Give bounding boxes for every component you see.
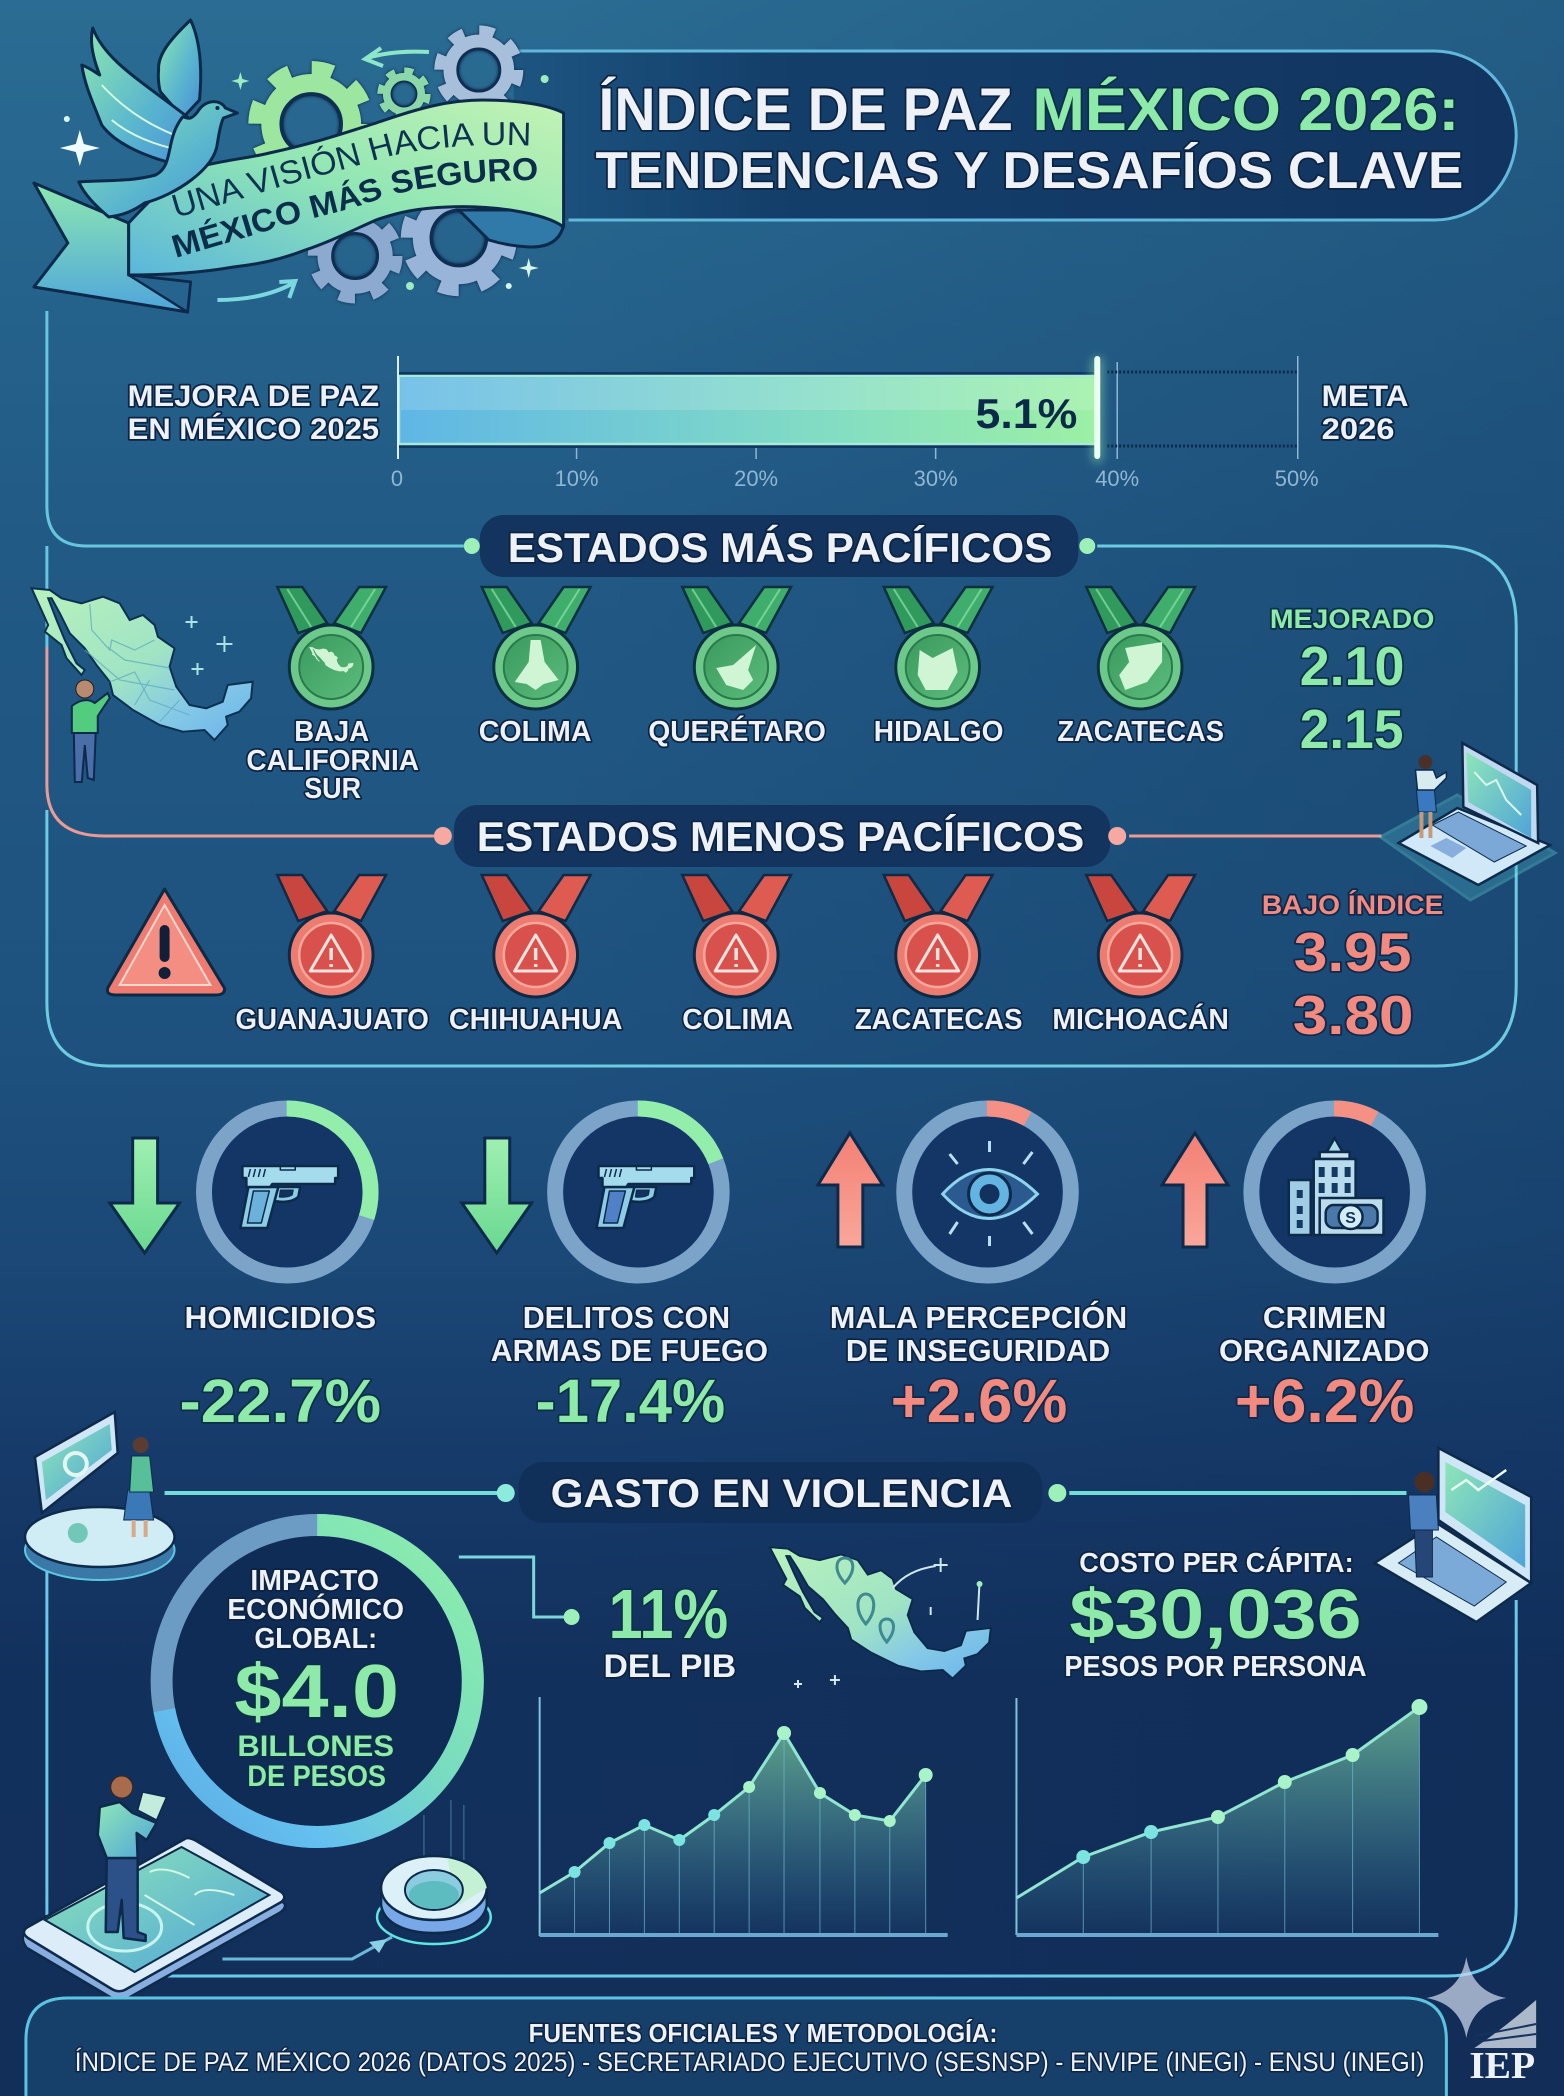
heading: violence spending: [497, 1462, 1066, 1523]
map with person: [32, 588, 253, 782]
icon: building and money: S: [1345, 1210, 1356, 1227]
medal: Querétaro: [648, 587, 826, 748]
bar label: MEJORA DE PAZ: [128, 380, 379, 413]
axis labels: 30%: [914, 466, 958, 491]
medal: Zacatecas: ZACATECAS: [1057, 716, 1224, 748]
low scores: [1262, 889, 1443, 1046]
stats row: [110, 1108, 1429, 1435]
stat: organized crime: +6.2%: [1235, 1367, 1414, 1435]
progress bar: [128, 356, 1408, 491]
heading pill: [464, 515, 1095, 577]
goal label: 2026: [1322, 413, 1395, 446]
medal: Zacatecas: [855, 875, 1022, 1036]
connector to GDP: [459, 1557, 580, 1625]
arrow to donut: [222, 1937, 392, 1959]
per capita cost: PESOS POR PERSONA: [1064, 1651, 1367, 1683]
medal: Guanajuato: [235, 875, 429, 1036]
chart points: [1076, 1699, 1427, 1864]
improved scores: MEJORADO: [1270, 604, 1434, 634]
stat: insecurity perception: MALA PERCEPCIÓN: [830, 1299, 1127, 1335]
stat: insecurity perception: [818, 1108, 1127, 1435]
sparkles and curved arrows: [60, 48, 549, 300]
stat: insecurity perception: DE INSEGURIDAD: [846, 1333, 1110, 1368]
medal: Michoacán: [1052, 875, 1229, 1036]
economic impact ring: [162, 1525, 473, 1837]
zero line: [397, 356, 399, 459]
medal: Colima: [479, 587, 592, 748]
title line 1: MÉXICO 2026:: [1032, 76, 1459, 143]
ring text: [227, 1565, 404, 1793]
per capita cost: $30,036: [1069, 1575, 1362, 1653]
per capita cost: COSTO PER CÁPITA:: [1079, 1547, 1354, 1578]
line chart: GDP: [540, 1697, 948, 1935]
stat: homicides: -22.7%: [180, 1367, 381, 1435]
warning icon: [107, 889, 225, 995]
stat: homicides: [110, 1108, 381, 1435]
medal: Colima: [682, 875, 793, 1036]
medal: Baja California Sur: CALIFORNIA: [246, 745, 419, 777]
medal: Baja California Sur: BAJA: [294, 716, 369, 748]
stat: organized crime: [1162, 1108, 1429, 1435]
medal: Hidalgo: [874, 587, 1003, 748]
improved scores: 2.15: [1300, 698, 1403, 760]
stat: firearms: DELITOS CON: [523, 1300, 730, 1335]
3D donut: [222, 1800, 491, 1959]
low scores: 3.95: [1294, 921, 1411, 983]
line chart: per capita: [1016, 1698, 1438, 1935]
ribbon tail: [34, 183, 191, 312]
medal: Colima: COLIMA: [479, 716, 592, 748]
icon: pistol: [597, 1166, 694, 1228]
medal: Baja California Sur: [246, 587, 419, 805]
section: most peaceful: [32, 515, 1434, 805]
monitor with analyst on disk: [25, 1412, 175, 1580]
ring text: GLOBAL:: [254, 1623, 377, 1655]
dove: [79, 20, 237, 217]
axis labels: [391, 466, 1319, 491]
ring text: IMPACTO: [250, 1565, 379, 1597]
axis labels: 50%: [1275, 466, 1319, 491]
footer heading: FUENTES OFICIALES Y METODOLOGÍA:: [529, 2018, 998, 2048]
ribbon fold: [459, 210, 564, 247]
medal: Hidalgo: HIDALGO: [874, 716, 1003, 748]
frame lines: [47, 311, 1516, 1976]
medal: Baja California Sur: SUR: [304, 773, 361, 805]
laptop with analyst: [1375, 1448, 1531, 1622]
banner illustration: [32, 18, 566, 314]
IEP logo: IEP: [1469, 2045, 1535, 2087]
medal: Zacatecas: ZACATECAS: [855, 1004, 1022, 1036]
medal: Guanajuato: GUANAJUATO: [235, 1004, 429, 1036]
icon: pistol: [240, 1166, 338, 1228]
title line 2: TENDENCIAS Y DESAFÍOS CLAVE: [596, 142, 1463, 200]
IEP logo: [1426, 1957, 1536, 2087]
footer sources: ÍNDICE DE PAZ MÉXICO 2026 (DATOS 2025) - SECRETARIADO EJECUTIVO (SESNSP) - ENVIPE (INEGI) - ENSU (INEGI): [75, 2047, 1424, 2077]
footer panel: [26, 1998, 1446, 2096]
goal label: META: [1322, 380, 1408, 413]
medal: Michoacán: MICHOACÁN: [1052, 1002, 1229, 1036]
title line 1: ÍNDICE DE PAZ: [599, 76, 1012, 143]
axis labels: 20%: [734, 466, 778, 491]
goal label: [1322, 380, 1408, 446]
ring text: BILLONES: [237, 1730, 394, 1763]
low scores: BAJO ÍNDICE: [1262, 889, 1443, 920]
bar value: 5.1%: [976, 390, 1077, 437]
stat: homicides: HOMICIDIOS: [185, 1300, 376, 1335]
stat: firearms: ARMAS DE FUEGO: [491, 1333, 768, 1368]
stat: firearms: [462, 1108, 768, 1435]
phone with analyst: [23, 1776, 285, 2001]
ring text: ECONÓMICO: [227, 1592, 404, 1626]
heading pill: [434, 805, 1126, 867]
ring text: DE PESOS: [247, 1760, 386, 1793]
ring text: $4.0: [234, 1649, 399, 1733]
axis labels: 10%: [555, 466, 599, 491]
stat: organized crime: ORGANIZADO: [1219, 1333, 1429, 1368]
gears: [255, 30, 518, 298]
stat: organized crime: CRIMEN: [1263, 1300, 1387, 1335]
ribbon text line 2: MÉXICO MÁS SEGURO: [172, 158, 537, 258]
map with pins: [770, 1547, 991, 1688]
title panel: [514, 51, 1516, 220]
medal: Querétaro: QUERÉTARO: [648, 714, 826, 748]
improved scores: 2.10: [1300, 635, 1404, 697]
laptop with presenter: [1381, 743, 1555, 900]
section: least peaceful: [107, 805, 1443, 1046]
arrow down: [110, 1138, 180, 1253]
heading pill: ESTADOS MENOS PACÍFICOS: [477, 813, 1084, 860]
title line 1: [599, 76, 1459, 143]
GDP stat: [603, 1575, 736, 1684]
icon: building and money: [1289, 1138, 1384, 1235]
medal: Chihuahua: [449, 875, 623, 1036]
heading: violence spending: GASTO EN VIOLENCIA: [551, 1472, 1012, 1516]
axis labels: 40%: [1095, 466, 1139, 491]
bar fill: [399, 372, 1097, 448]
axis labels: 0: [391, 466, 403, 491]
medal: Chihuahua: CHIHUAHUA: [449, 1004, 623, 1036]
medal: Zacatecas: [1057, 587, 1224, 748]
low scores: 3.80: [1293, 984, 1413, 1046]
improved scores: [1270, 604, 1434, 760]
stat: insecurity perception: +2.6%: [891, 1367, 1067, 1435]
icon: eye: [943, 1141, 1037, 1246]
ribbon body: [129, 100, 564, 275]
GDP stat: 11%: [608, 1575, 728, 1653]
stat: firearms: -17.4%: [536, 1367, 725, 1435]
heading pill: ESTADOS MÁS PACÍFICOS: [508, 524, 1052, 571]
medal: Colima: COLIMA: [682, 1004, 793, 1036]
per capita cost: [1064, 1547, 1367, 1683]
bar label: EN MÉXICO 2025: [128, 412, 379, 446]
bar label: [128, 380, 379, 446]
chart points: [569, 1726, 933, 1878]
GDP stat: DEL PIB: [603, 1648, 736, 1684]
axis ticks: [577, 356, 1298, 459]
ribbon text line 1: UNA VISIÓN HACIA UN: [172, 122, 529, 216]
bar marker: [1092, 356, 1102, 462]
